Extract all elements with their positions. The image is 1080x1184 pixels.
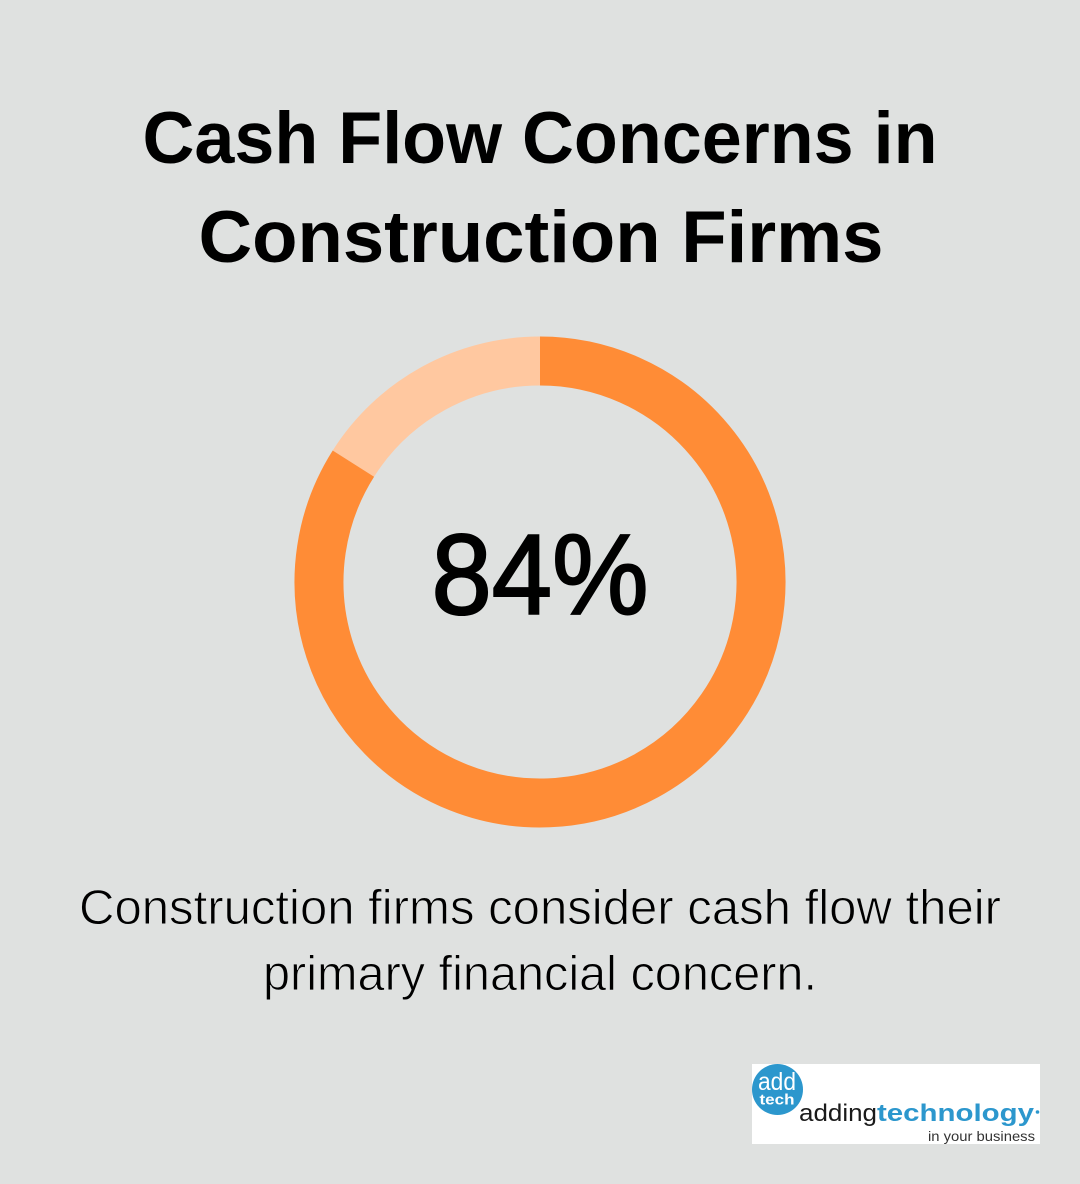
logo: adding technology: [752, 1064, 1040, 1144]
description text: [79, 881, 1001, 1001]
logo: adding technology: technology: [877, 1100, 1035, 1127]
logo icon: add tech badge: add: [758, 1068, 796, 1096]
highlighted segment: 84%: [319, 361, 761, 803]
donut value: 84%: [432, 512, 648, 639]
description text: primary financial concern.: [263, 947, 817, 1001]
title: Cash Flow Concerns in: [142, 98, 938, 179]
title: Construction Firms: [198, 197, 883, 278]
description text: Construction firms consider cash flow their: [79, 881, 1001, 935]
logo tagline: in your business: [928, 1129, 1035, 1144]
remaining segment: 16%: [353, 361, 540, 464]
logo wordmark: adding: [799, 1100, 877, 1127]
title: [142, 98, 938, 278]
logo icon: add tech badge: [752, 1064, 803, 1115]
donut chart: 84%: [319, 361, 761, 803]
logo icon: add tech badge: tech: [760, 1092, 794, 1108]
